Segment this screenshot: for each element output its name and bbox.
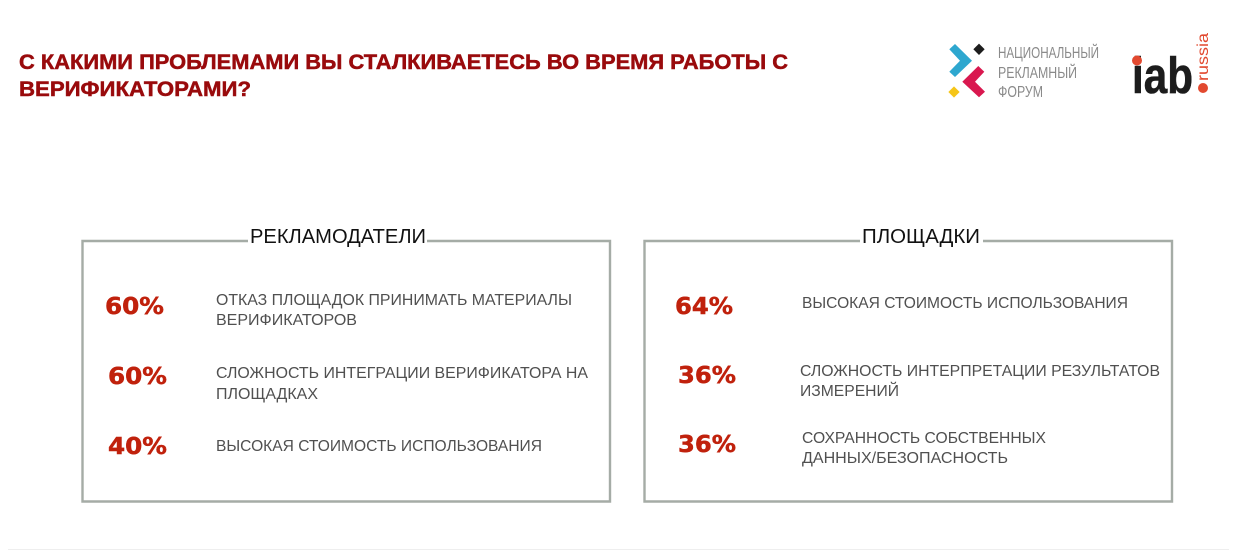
stat row 3: 36%: [678, 432, 736, 458]
stat row 1: [105, 292, 572, 329]
heading: platforms: ПЛОЩАДКИ: [862, 226, 980, 248]
logo: Национальный рекламный форум: [948, 43, 1099, 101]
title: [19, 51, 788, 101]
stat row 3: [108, 434, 542, 460]
logo: Национальный рекламный форум: РЕКЛАМНЫЙ: [998, 63, 1077, 82]
stat row 2: 36%: [678, 363, 736, 389]
stat row 1: ОТКАЗ ПЛОЩАДОК ПРИНИМАТЬ МАТЕРИАЛЫ: [216, 292, 572, 309]
stat row 2: ИЗМЕРЕНИЙ: [800, 382, 899, 400]
stat row 3: ДАННЫХ/БЕЗОПАСНОСТЬ: [802, 450, 1008, 467]
title: С КАКИМИ ПРОБЛЕМАМИ ВЫ СТАЛКИВАЕТЕСЬ ВО ВРЕМЯ РАБОТЫ С: [19, 51, 788, 74]
heading: advertisers: РЕКЛАМОДАТЕЛИ: [250, 226, 426, 248]
stat row 1: ВЕРИФИКАТОРОВ: [216, 312, 357, 329]
logo: iab russia: russia: [1195, 33, 1212, 81]
stat row 3: 40%: [108, 434, 167, 460]
stat row 1: 60%: [105, 294, 164, 320]
stat row 3: [678, 430, 1047, 467]
stat row 2: ПЛОЩАДКАХ: [216, 386, 319, 403]
panel: advertisers: [82, 226, 610, 502]
logo: Национальный рекламный форум: ФОРУМ: [998, 84, 1043, 101]
panel: platforms: [644, 226, 1172, 502]
title: ВЕРИФИКАТОРАМИ?: [19, 78, 251, 101]
stat row 2: СЛОЖНОСТЬ ИНТЕГРАЦИИ ВЕРИФИКАТОРА НА: [216, 365, 589, 382]
stat row 3: СОХРАННОСТЬ СОБСТВЕННЫХ: [802, 430, 1047, 447]
panel frame: [82, 241, 610, 502]
stat row 2: СЛОЖНОСТЬ ИНТЕРПРЕТАЦИИ РЕЗУЛЬТАТОВ: [800, 363, 1160, 380]
panel frame: [644, 241, 1172, 502]
logo: iab russia: iab: [1132, 47, 1193, 104]
logo: Национальный рекламный форум: НАЦИОНАЛЬНЫЙ: [998, 43, 1099, 62]
stat row 1: [675, 294, 1128, 320]
stat row 1: ВЫСОКАЯ СТОИМОСТЬ ИСПОЛЬЗОВАНИЯ: [802, 295, 1128, 312]
stat row 2: [678, 363, 1160, 400]
icon: forum mark: [948, 44, 985, 98]
stat row 2: [108, 364, 589, 403]
stat row 3: ВЫСОКАЯ СТОИМОСТЬ ИСПОЛЬЗОВАНИЯ: [216, 438, 542, 455]
stat row 1: 64%: [675, 294, 733, 320]
stat row 2: 60%: [108, 364, 167, 390]
